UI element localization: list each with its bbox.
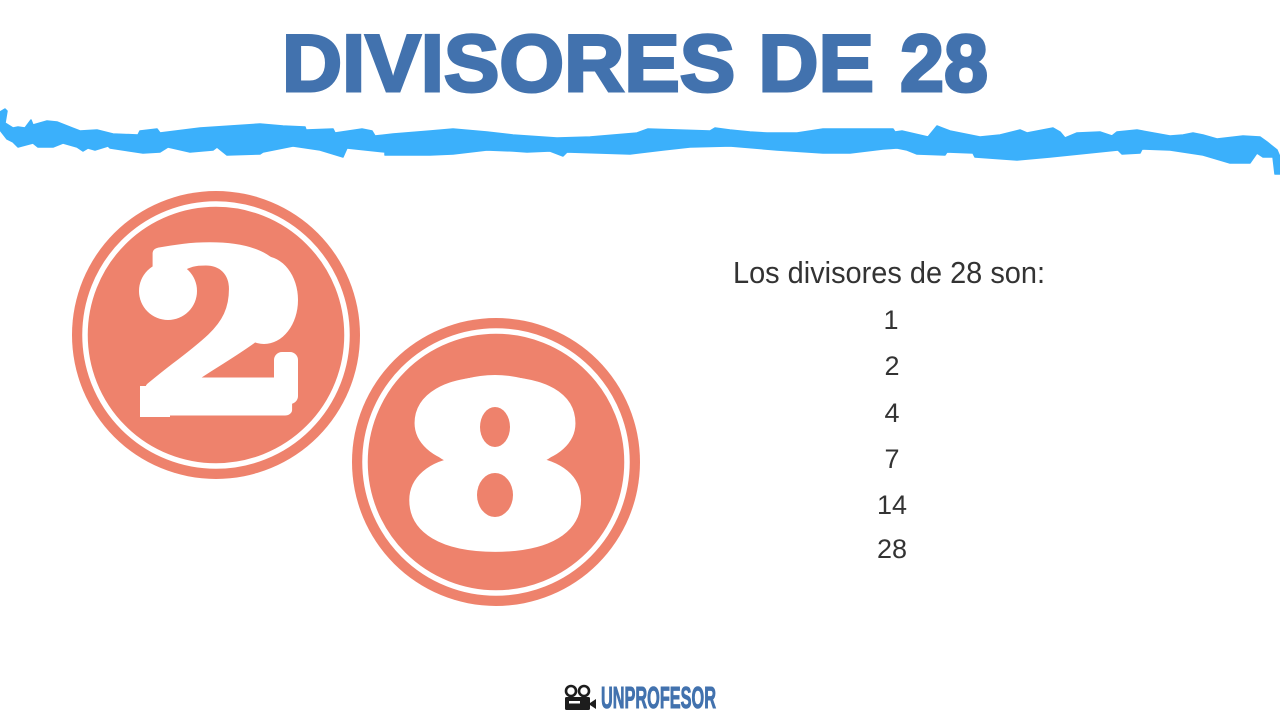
badge: digit 8: [352, 318, 640, 606]
badge: digit 8: 8: [404, 330, 586, 597]
divisors list: 1: [883, 305, 899, 335]
badge: digit 2: [72, 191, 360, 479]
icon: film camera: [565, 686, 596, 710]
divisors list: [877, 305, 907, 564]
title: 28: [900, 19, 988, 109]
title: DIVISORES DE: [282, 19, 874, 109]
divisors list: 14: [877, 490, 907, 520]
divisors list: 2: [884, 351, 900, 381]
brush stroke divider: [0, 109, 1280, 174]
divisors list: 28: [877, 534, 907, 564]
logo wordmark: UNPROFESOR: [601, 680, 716, 715]
list heading: Los divisores de 28 son:: [733, 255, 1045, 290]
badge: digit 2: 2: [139, 193, 299, 463]
divisors list: 4: [884, 398, 900, 428]
logo: unprofesor: [565, 680, 716, 715]
divisors list: 7: [884, 444, 900, 474]
